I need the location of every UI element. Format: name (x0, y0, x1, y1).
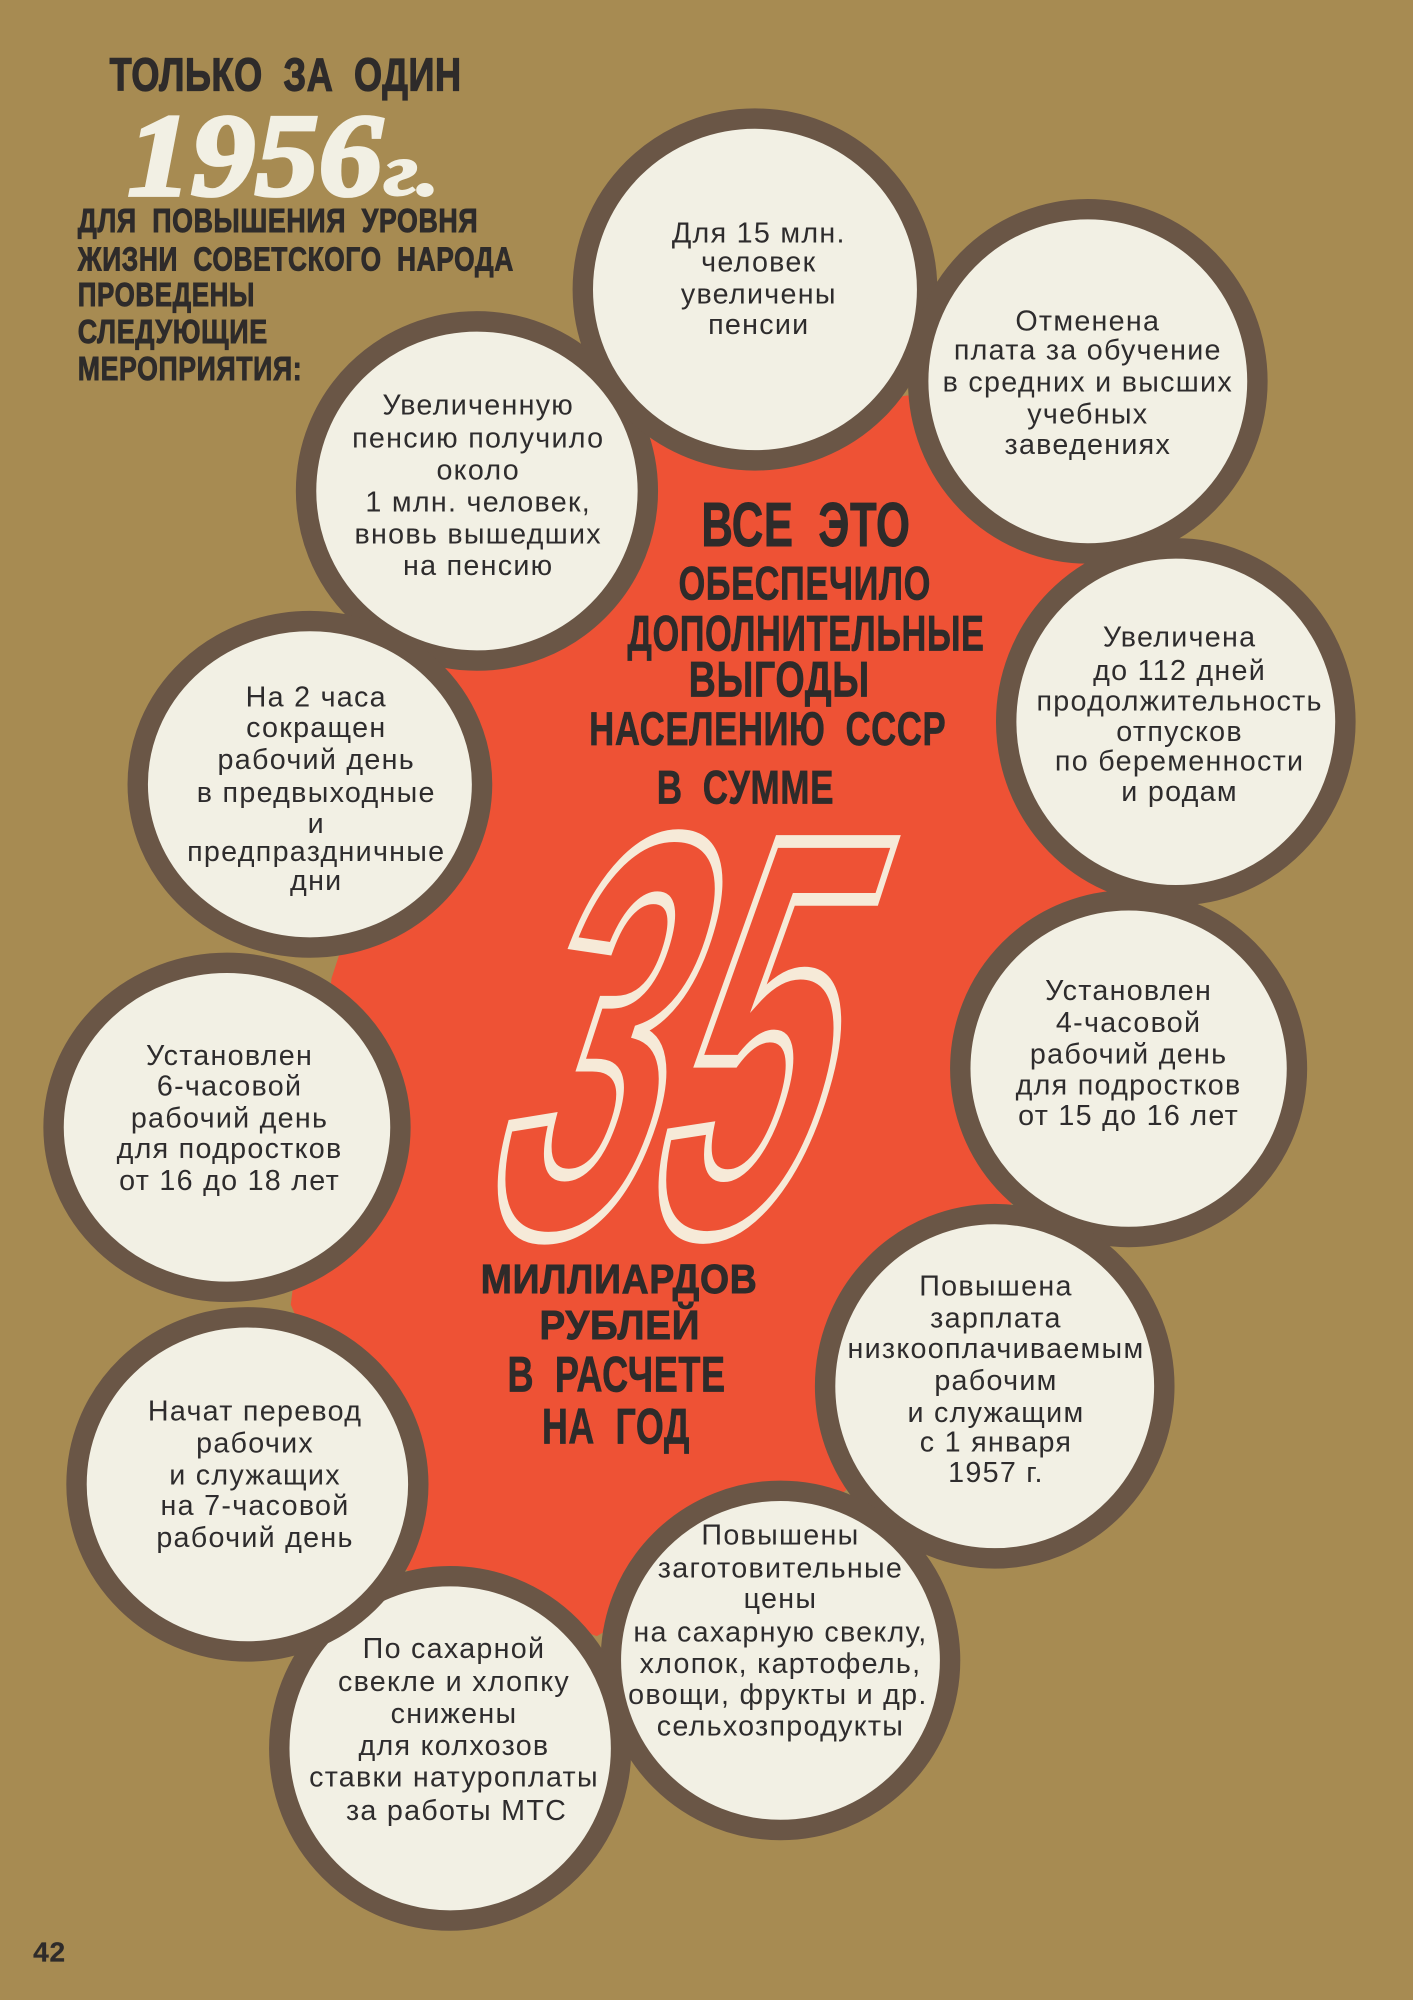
year 1956: г. (384, 129, 440, 211)
circle: raised wages: и служащим (907, 1397, 1084, 1429)
circle: shorter pre-holiday day: дни (290, 865, 342, 897)
circle: procurement prices (611, 1491, 950, 1830)
circle: MTS rates (279, 1576, 621, 1921)
year 1956: 1956 (128, 91, 383, 221)
circle: increased pension for new pensioners: около (436, 455, 520, 487)
circle: shorter pre-holiday day: и (308, 808, 325, 840)
circle: increased pension for new pensioners: Увеличенную (382, 390, 574, 422)
circle: 6-hour day for teens: от 16 до 18 лет (119, 1165, 340, 1197)
intro text (77, 203, 514, 388)
circle: raised wages (825, 1214, 1164, 1558)
circle: 4-hour day for teens: Установлен (1045, 975, 1212, 1007)
circle: pensions for 15 million (583, 119, 927, 460)
circle: shorter pre-holiday day: рабочий день (218, 744, 415, 776)
circle: raised wages: с 1 января (920, 1426, 1072, 1458)
central heading: ВСЕ ЭТО (701, 490, 911, 560)
circle: 7-hour day: на 7-часовой (161, 1490, 350, 1522)
intro text: ЖИЗНИ СОВЕТСКОГО НАРОДА (77, 241, 514, 278)
red central shape (291, 395, 1107, 1636)
circle: procurement prices: хлопок, картофель, (640, 1648, 921, 1680)
circle: MTS rates: для колхозов (359, 1730, 549, 1762)
circle: 7-hour day (77, 1317, 418, 1651)
circle: 6-hour day for teens: рабочий день (131, 1102, 328, 1134)
circle: maternity leave: отпусков (1116, 716, 1243, 748)
lower heading: НА ГОД (542, 1399, 690, 1455)
circle: procurement prices: Повышены (701, 1519, 860, 1551)
circle: shorter pre-holiday day: в предвыходные (197, 777, 436, 809)
circle: tuition abolished (918, 209, 1257, 553)
circle: 6-hour day for teens: для подростков (117, 1133, 343, 1165)
lower heading: РУБЛЕЙ (539, 1302, 700, 1348)
lower heading: В РАСЧЕТЕ (508, 1346, 726, 1402)
circle: 4-hour day for teens: рабочий день (1030, 1039, 1227, 1071)
circle: 6-hour day for teens: Установлен (146, 1040, 313, 1072)
circle: increased pension for new pensioners: 1 млн. человек, (365, 486, 591, 518)
circle: increased pension for new pensioners: пенсию получило (352, 423, 604, 455)
circle: increased pension for new pensioners: вновь вышедших (355, 518, 602, 550)
circle: MTS rates: ставки натуроплаты (309, 1762, 599, 1794)
circle: 7-hour day: рабочих (196, 1428, 314, 1460)
circle: maternity leave: и родам (1121, 776, 1238, 808)
circle: tuition abolished: в средних и высших (943, 367, 1233, 399)
circle: maternity leave: продолжительность (1036, 685, 1323, 717)
page number: 42 (33, 1936, 66, 1967)
circle: procurement prices: заготовительные (658, 1553, 903, 1585)
title top line: ТОЛЬКО ЗА ОДИН (110, 49, 462, 101)
central heading: В СУММЕ (657, 760, 834, 813)
circle: procurement prices: сельхозпродукты (657, 1711, 904, 1743)
circle: procurement prices: овощи, фрукты и др. (628, 1679, 928, 1711)
circle: procurement prices: цены (744, 1583, 817, 1615)
circle: increased pension for new pensioners (306, 321, 648, 661)
circle: MTS rates: снижены (391, 1698, 517, 1730)
intro text: ПРОВЕДЕНЫ (78, 277, 255, 314)
intro text: ДЛЯ ПОВЫШЕНИЯ УРОВНЯ (78, 203, 478, 240)
lower heading (481, 1256, 758, 1455)
circle: tuition abolished: Отменена (1015, 305, 1160, 337)
intro text: МЕРОПРИЯТИЯ: (78, 351, 302, 388)
circle: 7-hour day: и служащих (169, 1459, 341, 1491)
circle: 4-hour day for teens: от 15 до 16 лет (1018, 1100, 1239, 1132)
circle: tuition abolished: заведениях (1005, 429, 1171, 461)
circle: shorter pre-holiday day (138, 621, 482, 948)
circle: shorter pre-holiday day: сокращен (246, 712, 386, 744)
circle: raised wages: Повышена (919, 1271, 1073, 1303)
circle: maternity leave (1006, 548, 1345, 895)
central heading: НАСЕЛЕНИЮ СССР (589, 702, 946, 755)
circle: procurement prices: на сахарную свеклу, (633, 1616, 928, 1648)
central heading: ДОПОЛНИТЕЛЬНЫЕ (627, 605, 985, 661)
circle: 7-hour day: рабочий день (156, 1522, 354, 1554)
circle: shorter pre-holiday day: предпраздничные (187, 836, 445, 868)
circle: increased pension for new pensioners: на пенсию (403, 550, 553, 582)
big number 35: 35 (430, 719, 955, 1353)
circle: raised wages: 1957 г. (948, 1457, 1044, 1489)
intro text: СЛЕДУЮЩИЕ (78, 314, 268, 351)
circle: pensions for 15 million: человек (701, 247, 816, 279)
circle: MTS rates: свекле и хлопку (338, 1666, 570, 1698)
circle: maternity leave: Увеличена (1103, 622, 1256, 654)
circle: raised wages: зарплата (930, 1303, 1062, 1335)
circle: shorter pre-holiday day: На 2 часа (246, 682, 387, 714)
circle: maternity leave: до 112 дней (1093, 655, 1266, 687)
circle: 4-hour day for teens: для подростков (1016, 1069, 1242, 1101)
circle: tuition abolished: плата за обучение (954, 335, 1222, 367)
circle: 4-hour day for teens: 4-часовой (1056, 1007, 1201, 1039)
circle: pensions for 15 million: Для 15 млн. (672, 217, 846, 249)
circle: pensions for 15 million: увеличены (681, 279, 837, 311)
circle: 4-hour day for teens (960, 900, 1297, 1237)
circle: pensions for 15 million: пенсии (708, 309, 809, 341)
circle: 6-hour day for teens (54, 963, 400, 1292)
circle: MTS rates: По сахарной (363, 1633, 545, 1665)
central heading: ВЫГОДЫ (689, 651, 870, 707)
central heading: ОБЕСПЕЧИЛО (678, 556, 931, 609)
circle: 7-hour day: Начат перевод (148, 1396, 362, 1428)
central heading (589, 490, 985, 813)
circle: raised wages: рабочим (934, 1365, 1058, 1397)
lower heading: МИЛЛИАРДОВ (481, 1256, 758, 1302)
circle: MTS rates: за работы МТС (346, 1795, 567, 1827)
circle: 6-hour day for teens: 6-часовой (157, 1071, 302, 1103)
circle: raised wages: низкооплачиваемым (848, 1333, 1144, 1365)
circle: maternity leave: по беременности (1055, 745, 1304, 777)
circle: tuition abolished: учебных (1027, 398, 1148, 430)
